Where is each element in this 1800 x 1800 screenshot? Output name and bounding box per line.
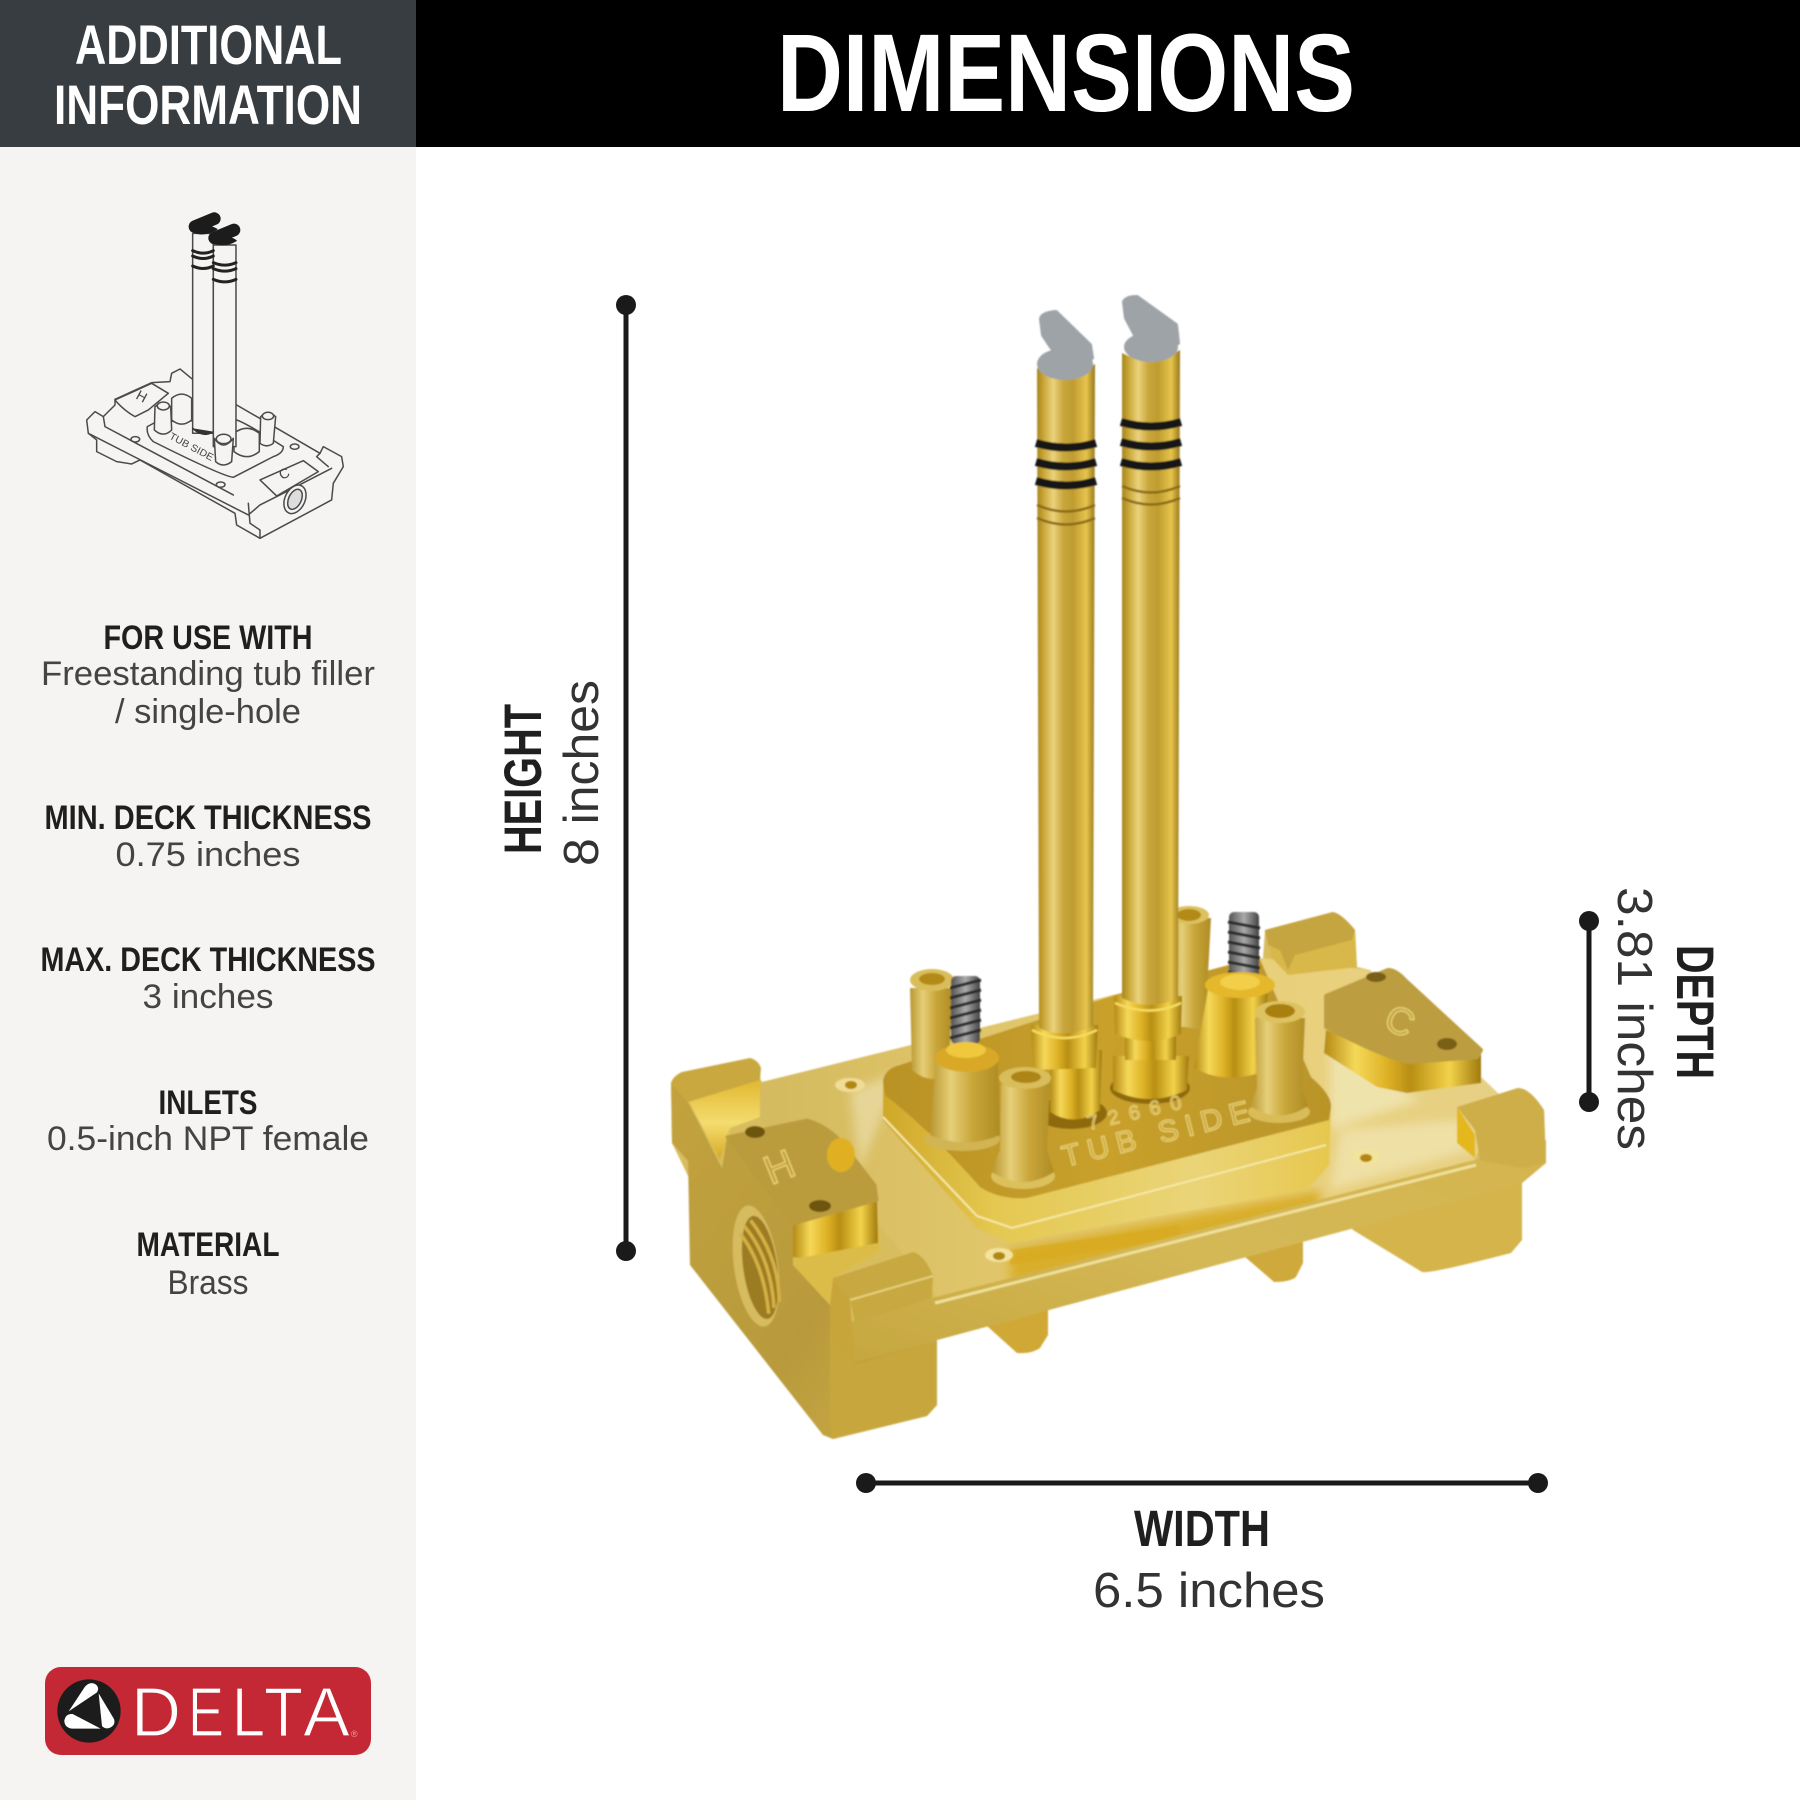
C pad: C [1378, 997, 1421, 1047]
spec: material [136, 1226, 280, 1302]
dimension: width: 6.5 inches [1093, 1564, 1325, 1618]
base silhouette [671, 912, 1546, 1362]
front countersink [985, 1248, 1013, 1262]
panel: sidebar background [0, 147, 416, 1800]
stamped part number: 72660 [1085, 1092, 1184, 1135]
lower corner block front [830, 1337, 937, 1439]
rod left [1031, 364, 1107, 1129]
inner pad recess [793, 1200, 880, 1305]
front right tab [1457, 1088, 1546, 1168]
spec: min deck thickness: 0.75 inches [116, 836, 300, 874]
spec: min deck thickness: MIN. DECK THICKNESS [44, 799, 372, 837]
rail edge highlight [935, 1165, 1476, 1303]
dimension: depth: 3.81 inches [1607, 887, 1661, 1150]
back left tab [671, 1058, 761, 1160]
spec: for use with: FOR USE WITH [104, 619, 312, 657]
dimension: height [494, 295, 636, 1261]
post back right [1169, 906, 1211, 1030]
raised platform [883, 957, 1331, 1265]
wordmark: delta [131, 1673, 350, 1751]
plate highlights [850, 1040, 1470, 1285]
spec: min deck thickness [44, 799, 372, 874]
dimension: width [856, 1473, 1548, 1618]
post front right [1248, 1001, 1310, 1123]
icon: line drawing of valve: TUB SIDE [167, 431, 215, 464]
header: additional information: INFORMATION [54, 73, 362, 136]
wordmark: delta: E [188, 1673, 224, 1751]
post front left [991, 1067, 1055, 1189]
spec: material: MATERIAL [136, 1226, 280, 1264]
wordmark: delta: A [303, 1673, 350, 1751]
spec: inlets [47, 1084, 369, 1158]
wordmark: delta: T [264, 1673, 303, 1751]
back right tab [1265, 912, 1357, 975]
base plate surface [730, 958, 1500, 1298]
header: additional information: ADDITIONAL [75, 13, 342, 76]
grey cap right [1124, 297, 1178, 362]
left block side face [671, 1083, 937, 1439]
spec: material: Brass [168, 1264, 248, 1302]
grey cap left [1037, 312, 1093, 380]
product: brass valve [671, 297, 1546, 1439]
spec: for use with: Freestanding tub filler [41, 655, 375, 693]
H pad [727, 1120, 878, 1258]
dimension: depth [1579, 887, 1724, 1150]
spec: max deck thickness [40, 941, 376, 1016]
header: additional information [0, 0, 416, 147]
reflected band [1010, 1225, 1180, 1265]
C pad [1324, 970, 1481, 1093]
spec: for use with: / single-hole [115, 693, 301, 731]
icon: delta mark [57, 1679, 121, 1743]
front rail [848, 1140, 1546, 1362]
wordmark: delta: D [131, 1673, 181, 1751]
logo: delta [45, 1667, 371, 1755]
dimension: height: HEIGHT [494, 704, 553, 854]
dimension: depth: DEPTH [1665, 945, 1724, 1079]
stub foot right [1244, 1240, 1303, 1282]
screw right [1228, 912, 1260, 980]
front corner block [830, 1252, 933, 1365]
logo: delta: ® [351, 1729, 358, 1739]
H pad: H [758, 1142, 801, 1193]
title: dimensions: DIMENSIONS [777, 12, 1355, 135]
stub foot left [987, 1308, 1048, 1353]
inlet threaded hole [726, 1203, 786, 1329]
title: dimensions [416, 0, 1800, 147]
spec: max deck thickness: 3 inches [142, 978, 274, 1016]
cone post right [1194, 972, 1275, 1078]
spec: for use with [41, 619, 375, 731]
right countersink [1352, 1149, 1380, 1165]
icon: line drawing of valve [87, 219, 343, 538]
spec: inlets: INLETS [158, 1084, 258, 1122]
icon: line drawing of valve: H [134, 387, 150, 406]
stamped tub side: TUB SIDE [1059, 1095, 1253, 1174]
screw left [950, 976, 981, 1044]
icon: line drawing of valve: C [276, 464, 292, 483]
spec: max deck thickness: MAX. DECK THICKNESS [40, 941, 376, 979]
dimension: width: WIDTH [1134, 1500, 1270, 1557]
dimension: height: 8 inches [555, 680, 609, 866]
spec: inlets: 0.5-inch NPT female [47, 1120, 369, 1158]
left stud countersink [835, 1078, 865, 1092]
cone post left [924, 1042, 1000, 1151]
post back left [910, 969, 954, 1079]
wordmark: delta: L [232, 1673, 265, 1751]
rear foot [1350, 1178, 1522, 1272]
rod right [1110, 350, 1190, 1104]
